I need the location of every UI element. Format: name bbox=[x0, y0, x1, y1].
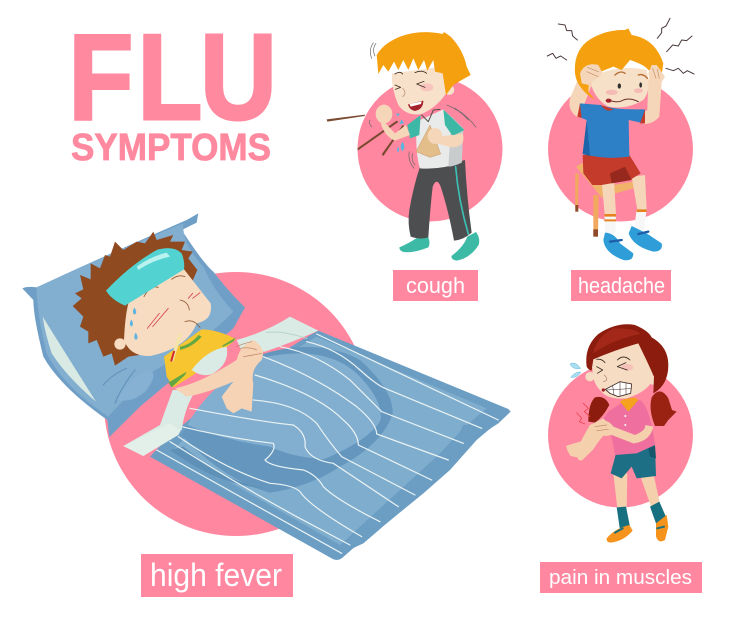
boy arms bbox=[569, 78, 662, 124]
girl mouth bbox=[605, 382, 632, 397]
pink circle: high fever bbox=[104, 272, 368, 536]
pink circle: cough bbox=[358, 76, 502, 222]
droplets bbox=[396, 113, 404, 153]
girl head bbox=[592, 343, 653, 399]
boy legs bbox=[602, 175, 647, 214]
boy arms and hands bbox=[175, 340, 263, 413]
icon: sick boy bbox=[73, 232, 263, 413]
icon: girl with muscle pain bbox=[566, 324, 677, 543]
icon: coughing boy bbox=[327, 32, 479, 261]
panel: headache bbox=[547, 18, 694, 301]
girl shoes bbox=[607, 515, 668, 543]
panel: pain in muscles bbox=[540, 324, 702, 593]
pain zigzags bbox=[547, 18, 694, 74]
icon: boy with headache bbox=[547, 18, 694, 260]
girl socks bbox=[617, 502, 667, 530]
title word: FLU: FLU bbox=[68, 9, 277, 146]
label: cough: cough bbox=[406, 273, 465, 298]
boy trousers bbox=[409, 160, 472, 241]
icon: pillow bbox=[22, 213, 245, 437]
boy face bbox=[124, 268, 211, 356]
label: pain in muscles: pain in muscles bbox=[549, 567, 692, 589]
title bbox=[68, 9, 277, 169]
boy shoes bbox=[603, 226, 662, 260]
bed sheet fold bbox=[123, 317, 318, 456]
girl hair bbox=[586, 324, 668, 393]
boy shoes bbox=[399, 232, 479, 261]
label: headache: headache bbox=[578, 273, 665, 298]
boy mouth bbox=[408, 101, 423, 111]
label: high fever: high fever bbox=[150, 557, 282, 593]
boy shorts bbox=[583, 155, 641, 185]
boy arms bbox=[381, 123, 464, 147]
pink circle: headache bbox=[548, 76, 693, 222]
girl legs bbox=[613, 473, 661, 508]
boy shirt bbox=[578, 103, 645, 158]
label: cough bbox=[393, 270, 478, 301]
icon: blanket bbox=[123, 317, 511, 560]
boy hands bbox=[580, 64, 665, 87]
blanket stripes bbox=[157, 334, 498, 553]
panel: cough bbox=[327, 32, 502, 301]
pigtails bbox=[651, 391, 677, 426]
tissue bbox=[416, 125, 441, 157]
boy socks bbox=[604, 209, 647, 234]
label: pain in muscles bbox=[540, 562, 702, 593]
girl arms and hand bbox=[566, 418, 612, 461]
boy hair bbox=[377, 32, 471, 95]
cold pack bbox=[106, 248, 184, 306]
boy head bbox=[392, 67, 448, 114]
panel: high fever bbox=[22, 213, 511, 597]
boy hair bbox=[73, 232, 197, 366]
title word: SYMPTOMS: SYMPTOMS bbox=[71, 127, 271, 169]
sweat drops bbox=[570, 363, 581, 377]
sweat drops bbox=[130, 307, 138, 340]
boy shirt bbox=[416, 109, 463, 169]
pink circle: pain in muscles bbox=[548, 362, 693, 508]
girl shorts bbox=[611, 445, 656, 478]
cough blasts bbox=[327, 115, 404, 156]
boy head bbox=[589, 68, 649, 107]
boy hair bbox=[575, 28, 663, 100]
girl shirt bbox=[600, 400, 655, 455]
thermometer bbox=[172, 335, 180, 360]
chair bbox=[576, 163, 645, 197]
boy shirt bbox=[164, 329, 236, 387]
fist bbox=[376, 105, 392, 123]
